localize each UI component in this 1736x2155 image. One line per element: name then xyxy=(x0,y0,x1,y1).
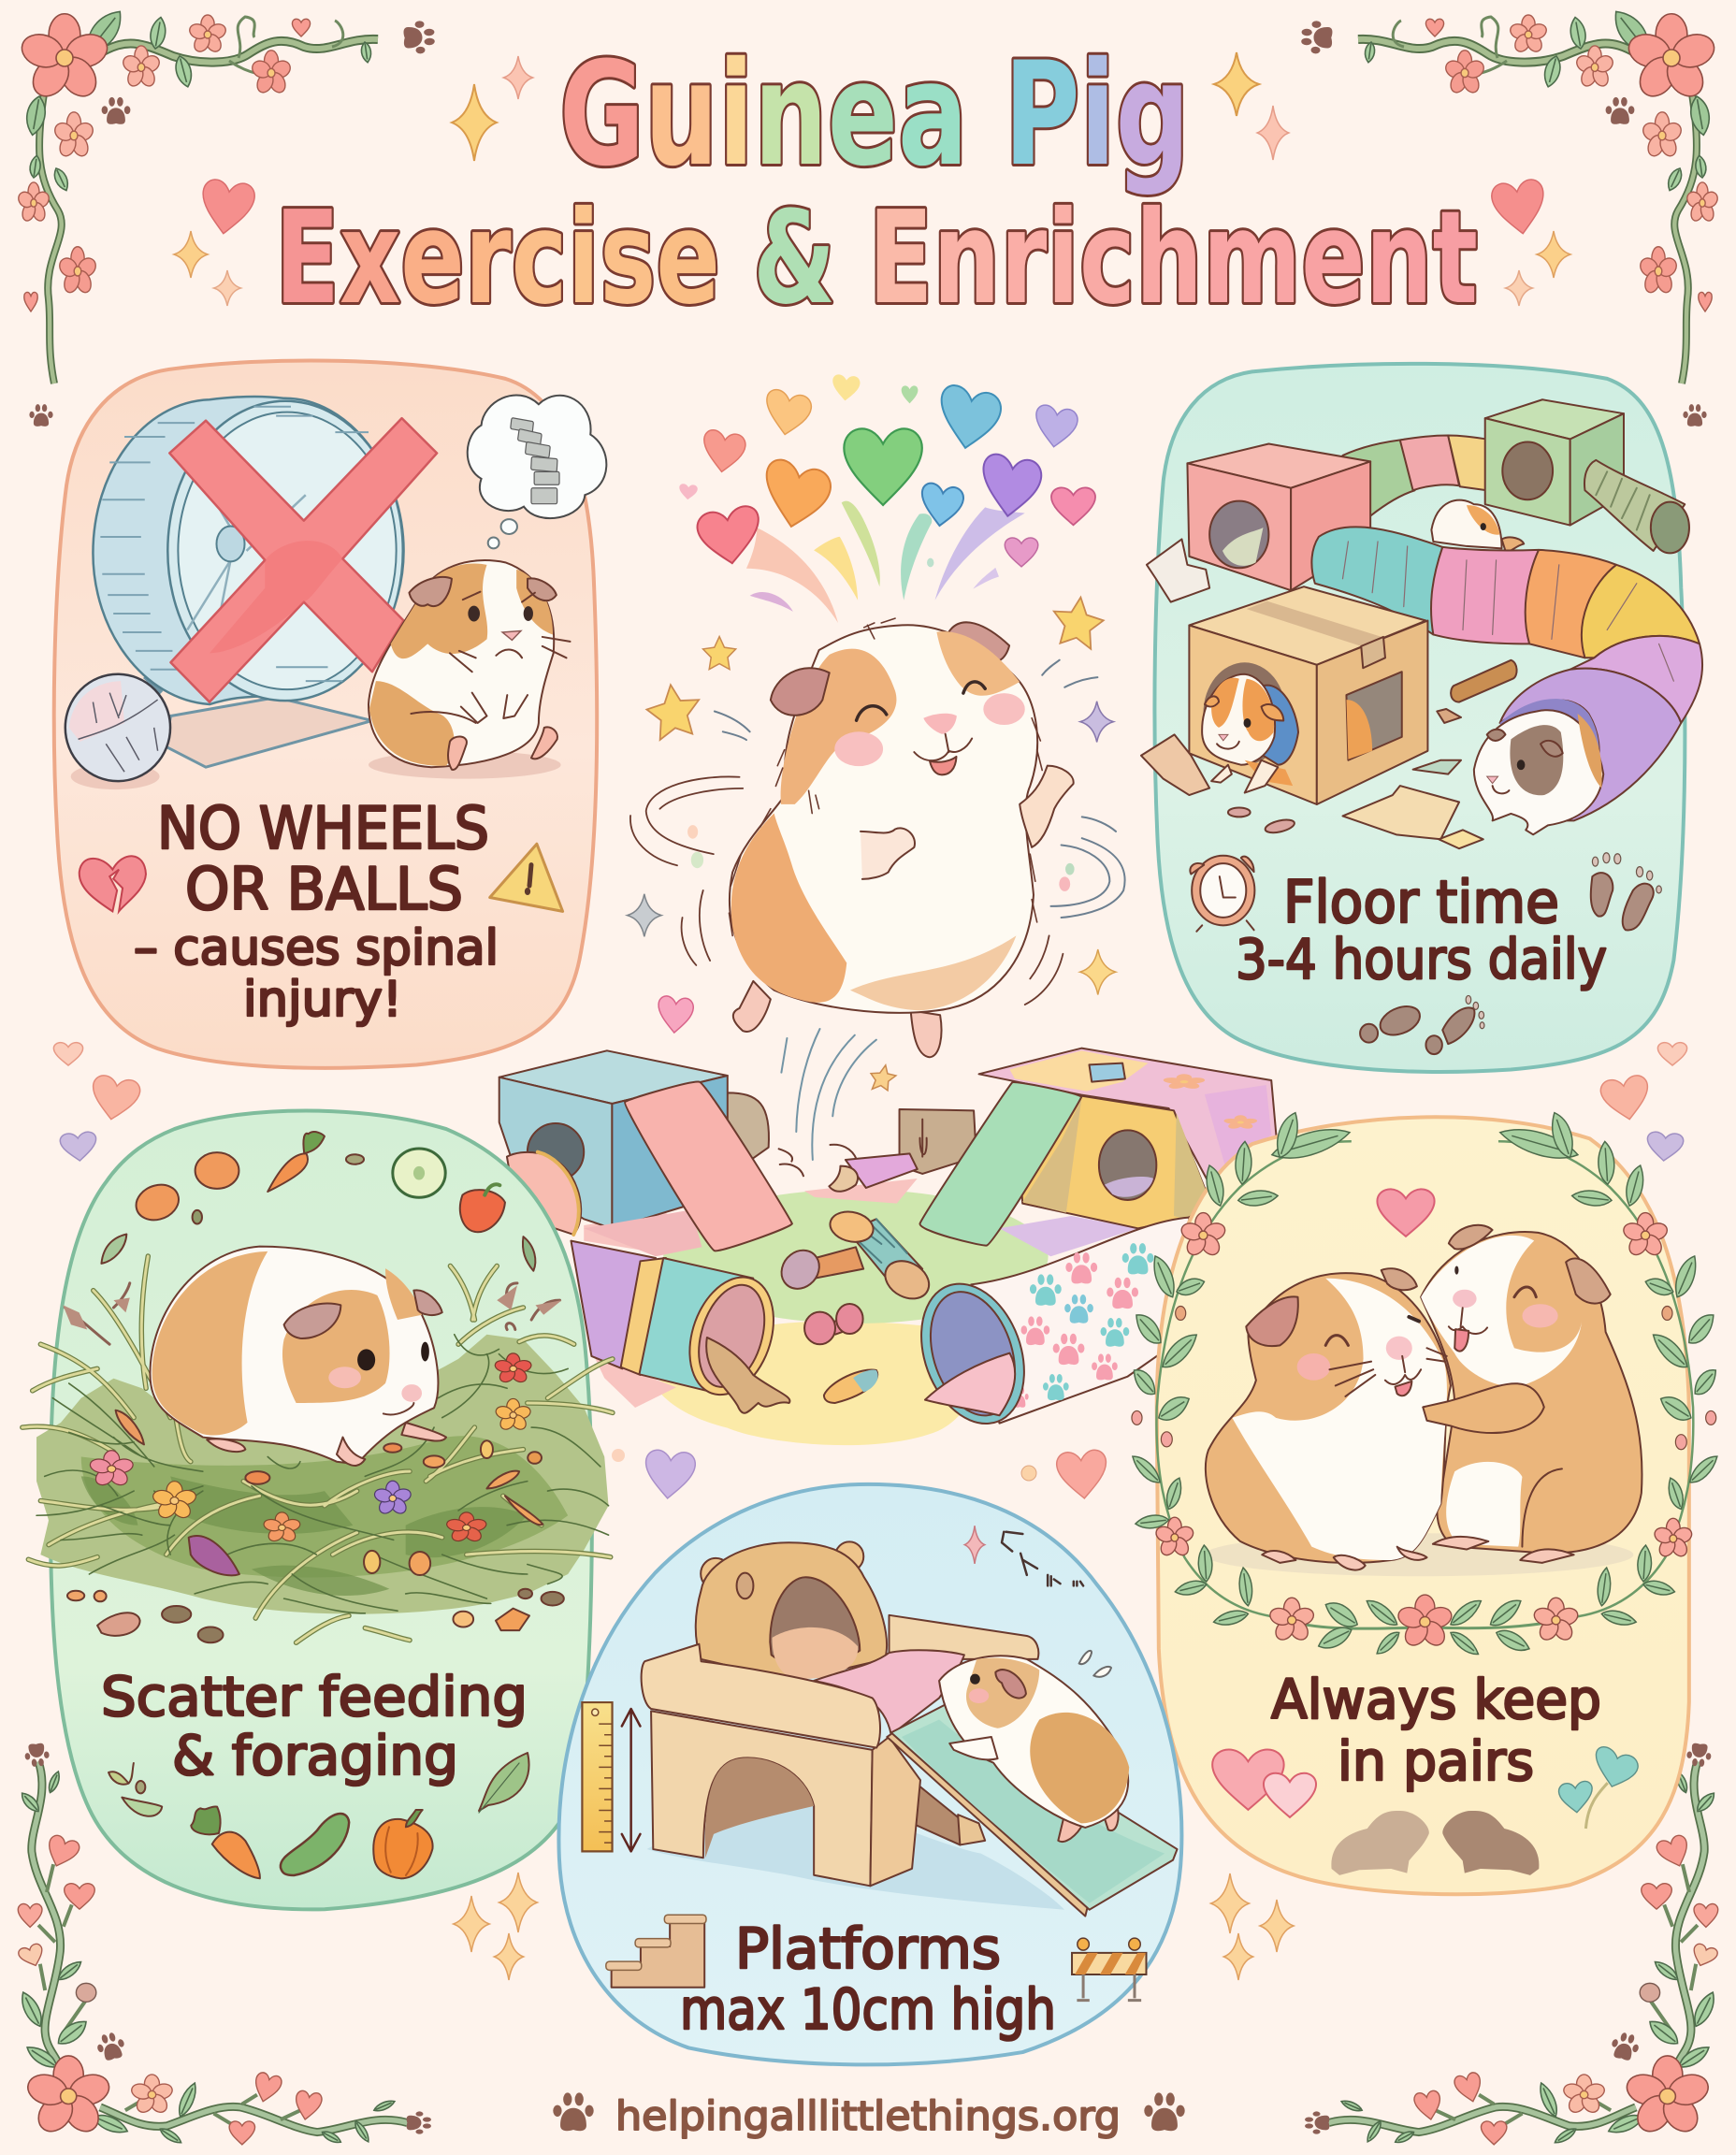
title xyxy=(275,32,1478,333)
pink tube end xyxy=(507,1152,581,1235)
wreath bottom xyxy=(1154,1213,1694,1659)
stars and sparkles xyxy=(628,593,1116,1034)
panel 1 text xyxy=(134,794,499,1028)
floor washes xyxy=(656,1322,978,1445)
panel 3 text: Scatter feeding xyxy=(101,1665,528,1728)
sad guinea pig xyxy=(369,560,570,779)
guinea pig right xyxy=(1421,1225,1642,1563)
side hearts xyxy=(53,1043,1687,1500)
patterned block xyxy=(979,1049,1277,1185)
small toy tube xyxy=(829,1153,918,1192)
panel 3 text: & foraging xyxy=(172,1724,458,1787)
igloo hut xyxy=(696,1541,887,1681)
pink fleece xyxy=(814,1650,964,1735)
panel 1 text: OR BALLS xyxy=(185,855,463,923)
striped tunnel left xyxy=(571,1241,789,1413)
panel 4 text: max 10cm high xyxy=(680,1977,1056,2043)
icon: footprints bottom xyxy=(1360,995,1484,1054)
panel 5 text: Always keep xyxy=(1271,1668,1601,1731)
guinea pig arm xyxy=(1423,1383,1544,1433)
scribble marks xyxy=(1002,1532,1083,1585)
panel: no wheels or balls xyxy=(54,361,606,1068)
panel 1 text: – causes spinal xyxy=(134,920,499,976)
icon: small leaves xyxy=(108,1763,162,1816)
icon: barrier xyxy=(1072,1938,1146,2001)
icon: heart xyxy=(1377,1189,1435,1237)
food scatter top xyxy=(101,1132,535,1271)
panel 4 text xyxy=(680,1916,1056,2043)
rainbow hearts xyxy=(679,374,1095,569)
floral corner top-right xyxy=(1301,5,1719,427)
chew toys xyxy=(777,1208,936,1403)
panel 2 text xyxy=(1236,868,1607,991)
floor shadow xyxy=(1205,1533,1633,1576)
icon: carrot xyxy=(191,1806,260,1878)
dried herbs xyxy=(63,1283,562,1344)
center happy guinea pig with hearts xyxy=(628,374,1125,1057)
wreath left xyxy=(1130,1107,1352,1628)
icon: thought bubble with spine xyxy=(468,395,606,548)
panel: scatter feeding xyxy=(22,1110,613,1909)
rainbow tunnel xyxy=(1311,527,1702,820)
panel: platforms xyxy=(558,1484,1181,2064)
icon: guinea pig silhouettes xyxy=(1331,1811,1539,1875)
icon: footprints right xyxy=(1591,853,1661,931)
panel: floor time xyxy=(1141,364,1702,1072)
pink ramp xyxy=(625,1082,792,1251)
happy guinea pig xyxy=(729,618,1074,1057)
wreath right xyxy=(1498,1107,1720,1628)
green ramp xyxy=(919,1082,1081,1246)
icon: alarm clock xyxy=(1190,856,1254,932)
panel 5 text xyxy=(1271,1668,1601,1793)
panel: always keep in pairs xyxy=(1130,1107,1720,1894)
wooden platform xyxy=(642,1644,985,1886)
title sparkles and hearts xyxy=(174,52,1570,306)
food scatter bottom xyxy=(67,1589,564,1642)
toys play area xyxy=(499,1029,1277,1445)
icon: red cross xyxy=(169,418,437,702)
footer xyxy=(553,2092,1185,2140)
green box xyxy=(1485,399,1624,526)
title line one: Guinea Pig xyxy=(559,32,1190,198)
cardboard box with guinea pig xyxy=(1189,586,1427,804)
panel 1 text: NO WHEELS xyxy=(157,794,489,862)
icon: hamster wheel xyxy=(93,397,404,767)
rainbow streaks xyxy=(746,501,1025,623)
icon: hamster ball xyxy=(65,674,170,789)
guinea pig left xyxy=(1206,1268,1451,1570)
floral corner top-left xyxy=(17,5,435,427)
floor shadow xyxy=(647,1801,1064,1910)
yellow tent block xyxy=(1015,1082,1210,1228)
upper tunnel xyxy=(1342,436,1487,516)
icon: bell pepper xyxy=(373,1810,433,1878)
rear wall of platform xyxy=(890,1615,1038,1659)
icon: warning triangle xyxy=(490,844,563,911)
panel 5 text: in pairs xyxy=(1338,1729,1534,1793)
chew stick xyxy=(1451,660,1517,702)
icon: steps xyxy=(606,1915,706,1988)
flowers in hay xyxy=(88,1353,542,1575)
paw print tunnel xyxy=(908,1218,1189,1427)
beige box xyxy=(900,1109,976,1174)
panel 2 text: 3-4 hours daily xyxy=(1236,927,1607,991)
icon: ruler xyxy=(582,1702,613,1851)
pink box xyxy=(1187,444,1370,590)
motion lines xyxy=(715,660,1125,918)
icon: broken heart xyxy=(80,856,146,911)
olive tube xyxy=(1584,460,1689,553)
icon: teal hearts xyxy=(1558,1744,1640,1829)
floral corner bottom-left xyxy=(17,1743,431,2146)
peeking guinea pig xyxy=(1431,500,1524,551)
panel 2 text: Floor time xyxy=(1283,868,1559,936)
title line two: Exercise & Enrichment xyxy=(275,184,1478,333)
icon: cucumber xyxy=(281,1814,349,1875)
panel 3 bottom icons xyxy=(108,1763,433,1878)
icon: paw right xyxy=(1144,2092,1185,2131)
bottom sparkles xyxy=(454,1873,1294,1980)
arrow: height xyxy=(622,1709,640,1851)
icon: spinach leaf xyxy=(479,1753,528,1813)
paper scraps xyxy=(1141,539,1483,848)
floral corner bottom-right xyxy=(1305,1743,1719,2146)
icon: pink hearts xyxy=(1212,1749,1316,1817)
guinea pig in tunnel xyxy=(1474,710,1603,834)
panel 4 text: Platforms xyxy=(735,1916,1001,1982)
blue cube xyxy=(499,1050,769,1256)
icon: pink sparkle xyxy=(964,1526,985,1564)
icon: paw left xyxy=(553,2092,594,2131)
panel 3 text xyxy=(101,1665,528,1787)
guinea pig in hay xyxy=(150,1247,446,1466)
ramp xyxy=(887,1704,1178,1916)
bounce marks xyxy=(781,1029,876,1160)
guinea pig on ramp xyxy=(939,1651,1129,1842)
hay pile xyxy=(22,1256,613,1642)
website text: helpingalllittlethings.org xyxy=(615,2093,1121,2140)
panel 1 text: injury! xyxy=(243,972,402,1028)
